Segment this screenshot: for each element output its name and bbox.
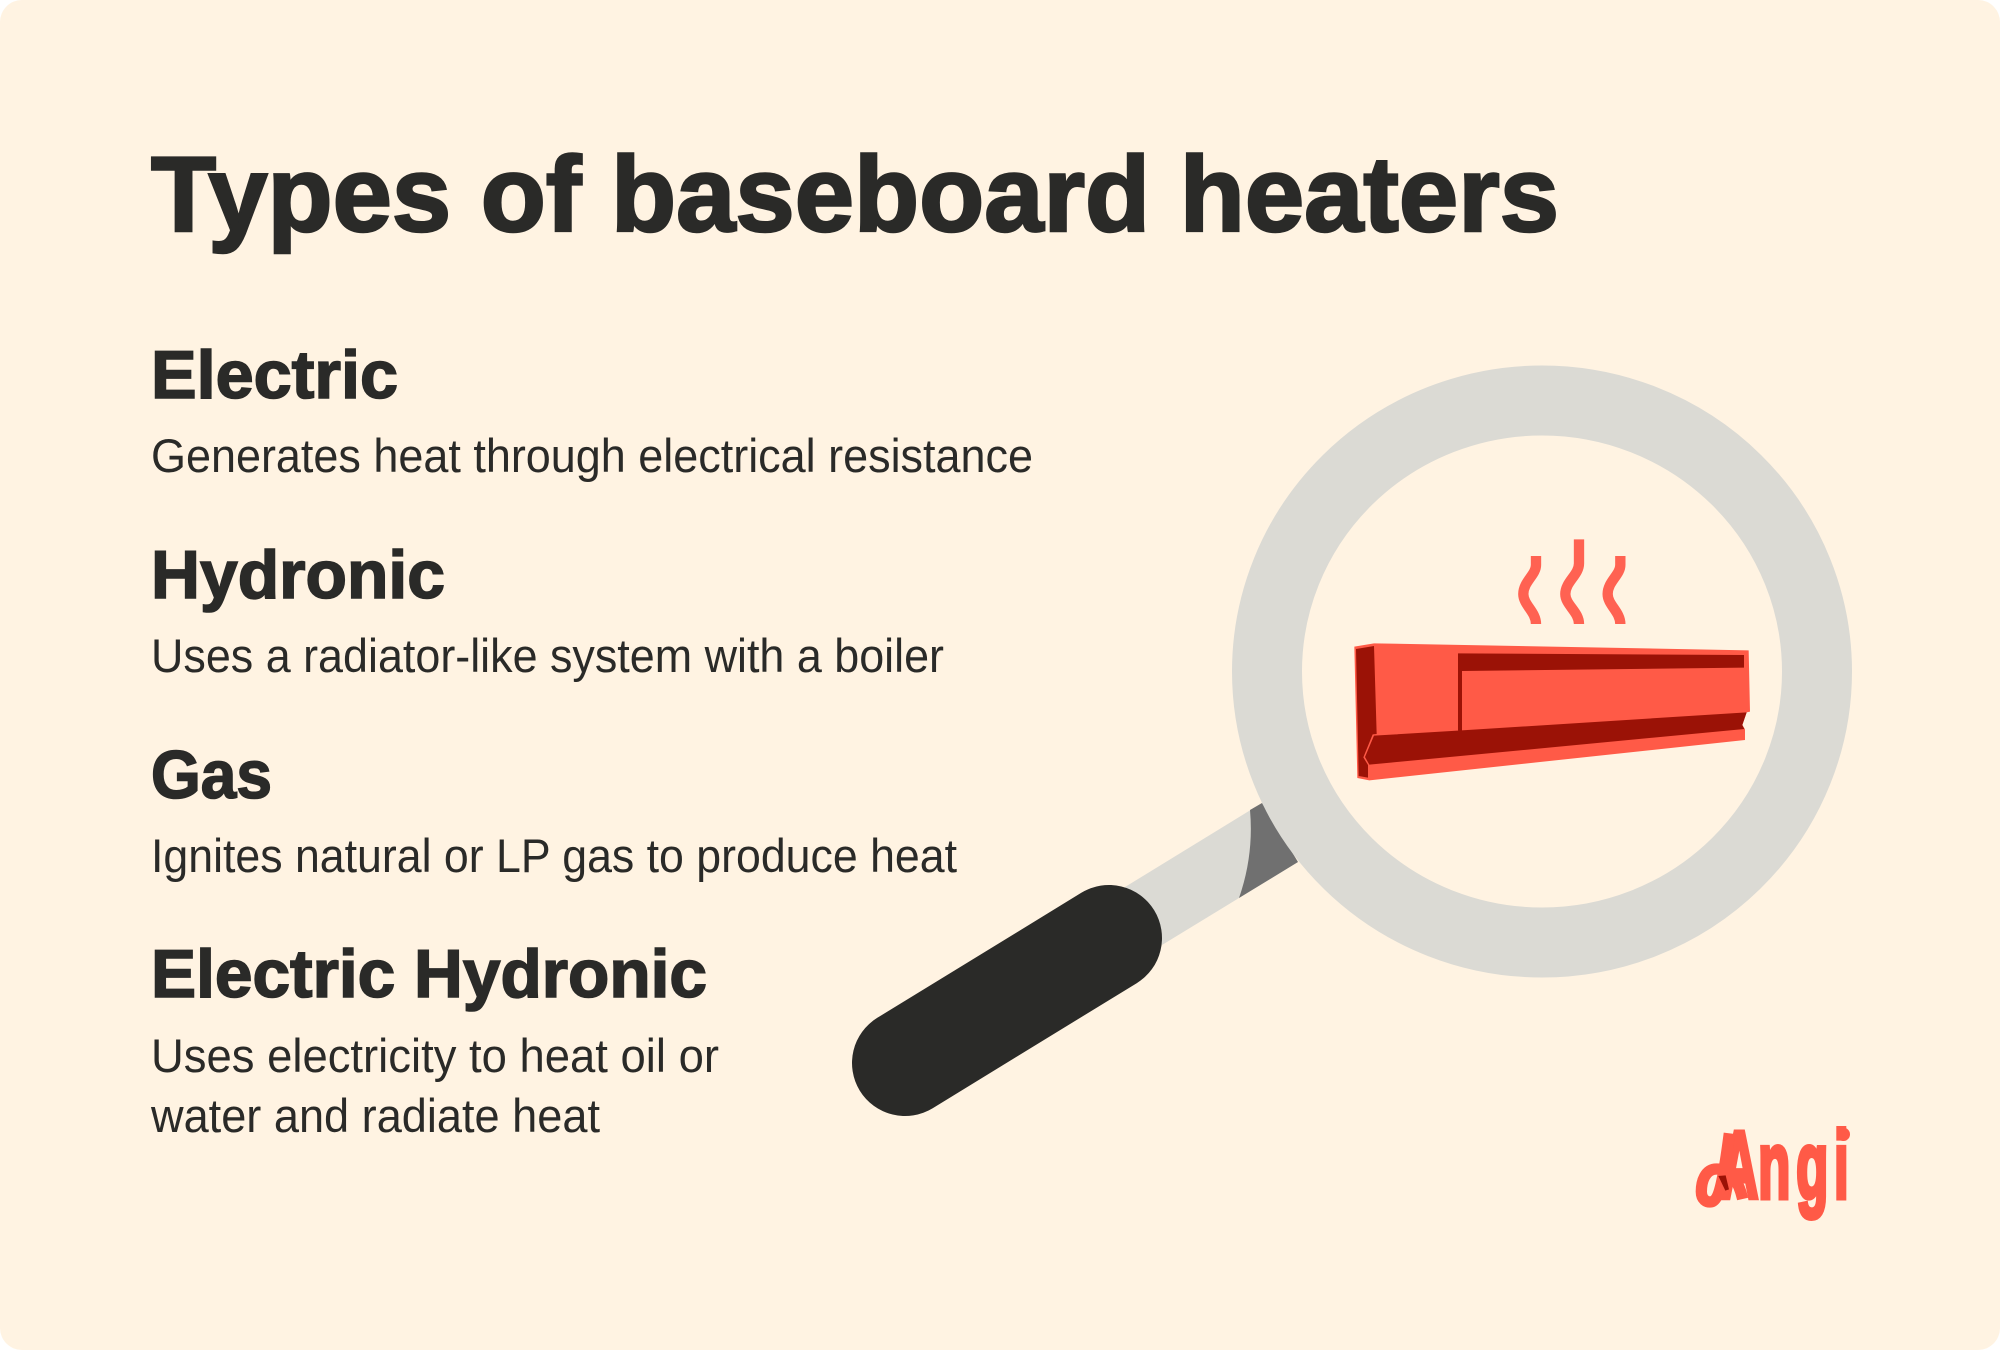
magnifier handle: [905, 938, 1109, 1063]
type: gas: [151, 737, 957, 882]
heater end cap: [1356, 646, 1377, 778]
description: gas: Ignites natural or LP gas to produce heat: [151, 829, 957, 882]
description: electric: Generates heat through electrical resistance: [151, 429, 1033, 482]
description: hydronic: Uses a radiator-like system with a boiler: [151, 629, 944, 682]
description: electric hydronic: Uses electricity to heat oil or: [151, 1029, 719, 1082]
heading: electric: Electric: [151, 337, 398, 413]
heat waves: [1523, 539, 1620, 624]
magnifier lens ring: [1267, 400, 1817, 942]
description: electric hydronic: water and radiate heat: [150, 1089, 600, 1142]
icon: magnifying glass: [905, 400, 1817, 1063]
heading: hydronic: Hydronic: [151, 537, 445, 613]
logo: Angi: [1701, 1112, 1850, 1219]
heater lower vent: [1365, 712, 1747, 765]
logo swash: [1701, 1128, 1850, 1202]
logo wordmark: Angi: [1720, 1112, 1849, 1219]
description: electric hydronic: [150, 1029, 719, 1142]
title: Types of baseboard heaters: [151, 134, 1559, 254]
magnifier shaft: [1125, 803, 1298, 945]
heading: gas: Gas: [151, 737, 272, 813]
heading: electric hydronic: Electric Hydronic: [151, 936, 707, 1012]
heater body: [1354, 643, 1750, 780]
type: electric hydronic: [150, 936, 719, 1142]
type: electric: [151, 337, 1033, 482]
type: hydronic: [151, 537, 944, 682]
magnifier shaft shadow: [1239, 803, 1298, 898]
icon: baseboard heater: [1354, 539, 1750, 780]
heater upper vent: [1458, 653, 1744, 731]
